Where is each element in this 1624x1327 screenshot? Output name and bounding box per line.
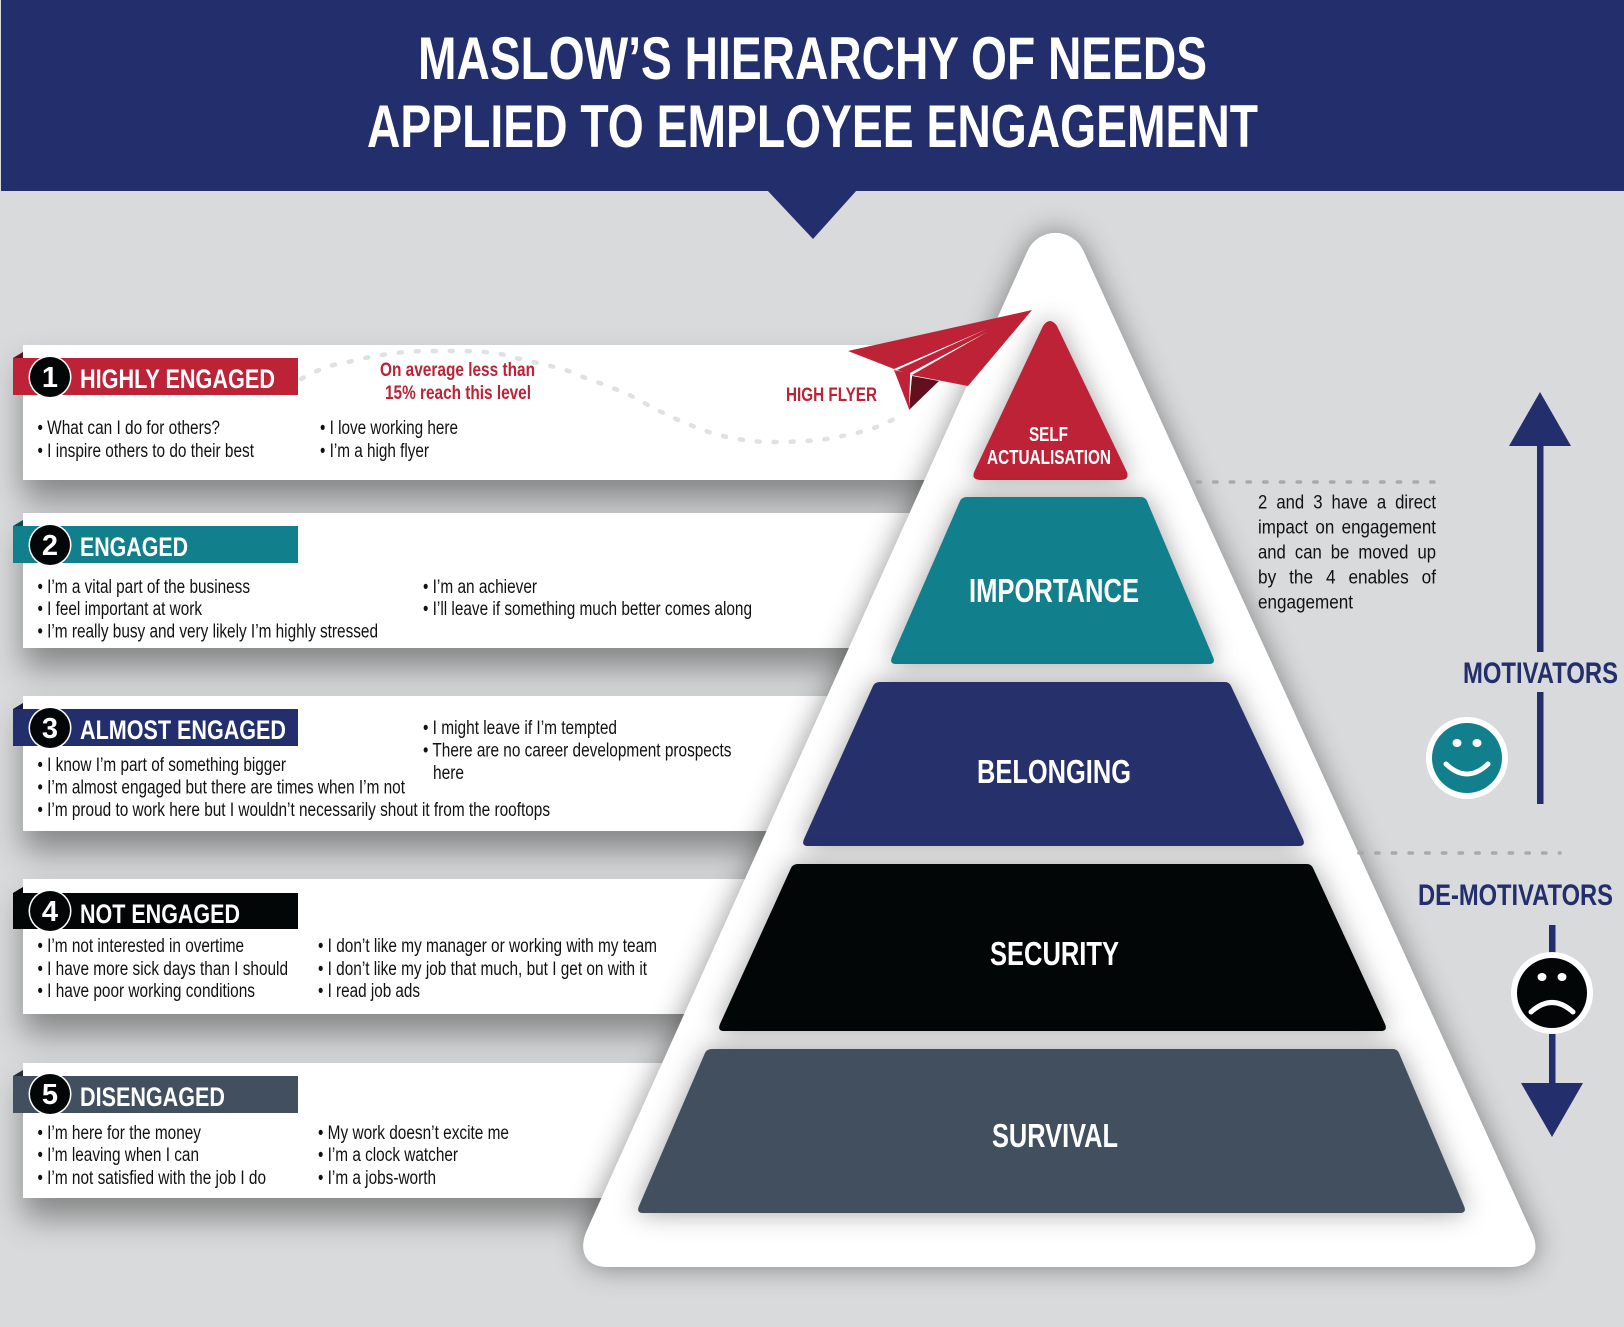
tier: survival: SURVIVAL bbox=[992, 1117, 1118, 1154]
bullet list: • I inspire others to do their best bbox=[38, 441, 255, 462]
panel 1: highly engaged bbox=[13, 345, 1023, 480]
arrow: motivators up bbox=[1509, 392, 1571, 804]
bullet list bbox=[38, 1123, 509, 1189]
tier: survival bbox=[638, 1049, 1465, 1213]
badge: 5 bbox=[42, 1079, 58, 1111]
badge: ENGAGED bbox=[80, 532, 188, 562]
badge: 1 bbox=[42, 362, 58, 394]
panel 2: engaged bbox=[13, 513, 973, 648]
bullet list: • There are no career development prospects bbox=[423, 740, 732, 762]
tier: self actualisation bbox=[973, 321, 1128, 480]
panel 4: not engaged bbox=[13, 879, 873, 1014]
divider: motivators top bbox=[1197, 480, 1436, 484]
bullet list: • I’m not interested in overtime bbox=[38, 936, 244, 957]
badge: 4 bbox=[42, 896, 58, 928]
badge: ALMOST ENGAGED bbox=[80, 715, 286, 745]
badge: 3 bbox=[42, 713, 58, 745]
tier: belonging bbox=[803, 682, 1304, 846]
bullet list: • I’m a high flyer bbox=[320, 441, 430, 462]
bullet list: • I’m not satisfied with the job I do bbox=[38, 1168, 266, 1189]
header banner bbox=[1, 0, 1624, 239]
bullet list: • What can I do for others? bbox=[38, 418, 220, 439]
bullet list: • I’m leaving when I can bbox=[38, 1145, 199, 1166]
bullet list: • I love working here bbox=[320, 418, 458, 439]
pyramid bbox=[583, 233, 1535, 1267]
icon: paper plane bbox=[848, 310, 1032, 410]
side note bbox=[1258, 492, 1437, 614]
bullet list: • I’m a clock watcher bbox=[318, 1145, 459, 1166]
badge: HIGHLY ENGAGED bbox=[80, 364, 275, 394]
callout: 15% reach this level bbox=[385, 383, 531, 404]
title: APPLIED TO EMPLOYEE ENGAGEMENT bbox=[367, 93, 1258, 160]
tier: belonging: BELONGING bbox=[977, 753, 1131, 790]
icon: smiley bbox=[1426, 717, 1508, 799]
bullet list: • I feel important at work bbox=[38, 599, 202, 620]
panel 3: almost engaged bbox=[13, 696, 923, 831]
bullet list: • I’m proud to work here but I wouldn’t necessarily shout it from the rooftops bbox=[38, 800, 550, 821]
tier: security: SECURITY bbox=[990, 935, 1119, 972]
bullet list: • I’m here for the money bbox=[38, 1123, 201, 1144]
tier: importance bbox=[891, 497, 1214, 664]
bullet list bbox=[38, 718, 732, 821]
badge bbox=[13, 1070, 298, 1116]
bullet list: • I know I’m part of something bigger bbox=[38, 755, 287, 776]
bullet list bbox=[38, 418, 458, 462]
badge bbox=[13, 520, 298, 566]
bullet list: • I might leave if I’m tempted bbox=[423, 718, 617, 739]
arrow: de-motivators down bbox=[1521, 925, 1583, 1137]
badge: DISENGAGED bbox=[80, 1082, 225, 1112]
bullet list: • I’m really busy and very likely I’m highly stressed bbox=[38, 622, 378, 642]
bullet list: • I have more sick days than I should bbox=[38, 959, 288, 980]
tier: self actualisation: SELF bbox=[1029, 424, 1068, 446]
bullet list: • I’m a vital part of the business bbox=[38, 577, 250, 598]
tier: self actualisation: ACTUALISATION bbox=[987, 447, 1111, 469]
side note: impact on engagement bbox=[1258, 518, 1437, 538]
title bbox=[367, 25, 1258, 160]
side note: engagement bbox=[1258, 592, 1354, 614]
bullet list: • I read job ads bbox=[318, 981, 420, 1002]
badge bbox=[13, 352, 298, 398]
divider: motivators / de-motivators bbox=[1359, 851, 1560, 855]
side note: by the 4 enables of bbox=[1258, 568, 1437, 588]
bullet list: • I’m an achiever bbox=[423, 577, 538, 598]
bullet list bbox=[38, 936, 657, 1002]
title: MASLOW’S HIERARCHY OF NEEDS bbox=[418, 25, 1207, 92]
badge: 2 bbox=[42, 530, 58, 562]
callout bbox=[380, 360, 535, 404]
icon: sad face bbox=[1511, 952, 1593, 1034]
side note: 2 and 3 have a direct bbox=[1258, 492, 1437, 514]
bullet list: here bbox=[433, 763, 464, 784]
bullet list: • My work doesn’t excite me bbox=[318, 1123, 509, 1144]
bullet list bbox=[38, 577, 752, 642]
bullet list: • I’m a jobs-worth bbox=[318, 1168, 436, 1189]
tier: security bbox=[719, 864, 1386, 1031]
callout: On average less than bbox=[380, 360, 535, 381]
tier: importance: IMPORTANCE bbox=[969, 572, 1139, 609]
dotted flight path bbox=[301, 351, 903, 442]
badge bbox=[13, 703, 298, 750]
bullet list: • I don’t like my manager or working with my team bbox=[318, 936, 657, 957]
bullet list: • I have poor working conditions bbox=[38, 981, 255, 1002]
high flyer label: HIGH FLYER bbox=[786, 385, 877, 406]
bullet list: • I’m almost engaged but there are times when I’m not bbox=[38, 778, 406, 798]
side note: and can be moved up bbox=[1258, 542, 1436, 564]
bullet list: • I’ll leave if something much better comes along bbox=[423, 599, 752, 620]
panel 5: disengaged bbox=[13, 1063, 823, 1198]
bullet list: • I don’t like my job that much, but I get on with it bbox=[318, 959, 648, 980]
badge: NOT ENGAGED bbox=[80, 899, 240, 929]
badge bbox=[13, 887, 298, 932]
